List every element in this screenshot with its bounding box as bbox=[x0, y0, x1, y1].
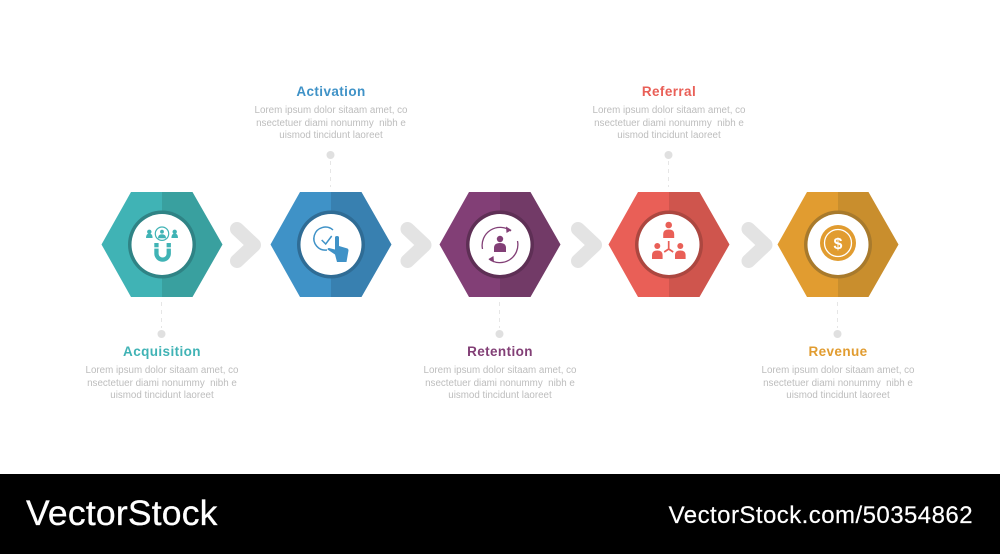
text block: referral: uismod tincidunt laoreet bbox=[617, 130, 721, 141]
text block: revenue: uismod tincidunt laoreet bbox=[786, 390, 890, 401]
connector: activation bbox=[326, 151, 334, 187]
connector: retention bbox=[496, 302, 504, 338]
arrow 2 bbox=[408, 229, 424, 261]
text block: retention: nsectetuer diami nonummy nibh e bbox=[425, 378, 575, 388]
text block: acquisition: uismod tincidunt laoreet bbox=[110, 390, 214, 401]
text block: retention: Lorem ipsum dolor sitaam amet, co bbox=[424, 365, 576, 376]
text block: activation: uismod tincidunt laoreet bbox=[279, 130, 383, 141]
arrow 1 bbox=[237, 229, 254, 261]
footer bar bbox=[0, 474, 1000, 554]
arrow 3 bbox=[578, 229, 595, 261]
text block: referral: Referral bbox=[642, 84, 696, 99]
text block: acquisition: Acquisition bbox=[123, 344, 201, 359]
arrow 4 bbox=[748, 229, 766, 261]
step 3 hexagon: retention bbox=[440, 192, 560, 297]
step 2 hexagon: activation bbox=[270, 192, 392, 297]
text block: retention: uismod tincidunt laoreet bbox=[448, 390, 552, 401]
connector: referral bbox=[664, 151, 672, 187]
text block: acquisition: Lorem ipsum dolor sitaam amet, co bbox=[86, 365, 238, 376]
text block: revenue: Revenue bbox=[808, 344, 868, 359]
text block: referral bbox=[592, 84, 746, 141]
footer url: VectorStock.com/50354862 bbox=[669, 502, 973, 529]
icon: hand and check mark bbox=[314, 227, 348, 262]
text block: activation: Activation bbox=[296, 84, 366, 99]
text block: acquisition: nsectetuer diami nonummy nibh e bbox=[87, 378, 237, 388]
text block: revenue: Lorem ipsum dolor sitaam amet, co bbox=[762, 365, 914, 376]
icon: magnet attracting people bbox=[146, 227, 178, 262]
icon: referral network of people bbox=[652, 222, 686, 259]
text block: activation: Lorem ipsum dolor sitaam amet, co bbox=[254, 105, 408, 116]
text block: referral: nsectetuer diami nonummy nibh e bbox=[594, 118, 744, 128]
icon: person in circular arrows bbox=[482, 226, 518, 263]
text block: retention: Retention bbox=[467, 344, 533, 359]
text block: revenue bbox=[762, 344, 914, 401]
connector: revenue bbox=[834, 302, 842, 338]
connector: acquisition bbox=[158, 302, 166, 338]
step 1 hexagon: acquisition bbox=[102, 192, 222, 297]
footer logo: VectorStock bbox=[26, 493, 218, 533]
step 5 hexagon: revenue bbox=[778, 192, 898, 297]
step 4 hexagon: referral bbox=[608, 192, 730, 297]
text block: activation bbox=[254, 84, 408, 141]
icon: dollar coin: $ bbox=[834, 236, 843, 253]
text block: retention bbox=[424, 344, 576, 401]
text block: activation: nsectetuer diami nonummy nibh e bbox=[256, 118, 406, 128]
text block: revenue: nsectetuer diami nonummy nibh e bbox=[763, 378, 913, 388]
text block: referral: Lorem ipsum dolor sitaam amet, co bbox=[592, 105, 746, 116]
text block: acquisition bbox=[86, 344, 238, 401]
